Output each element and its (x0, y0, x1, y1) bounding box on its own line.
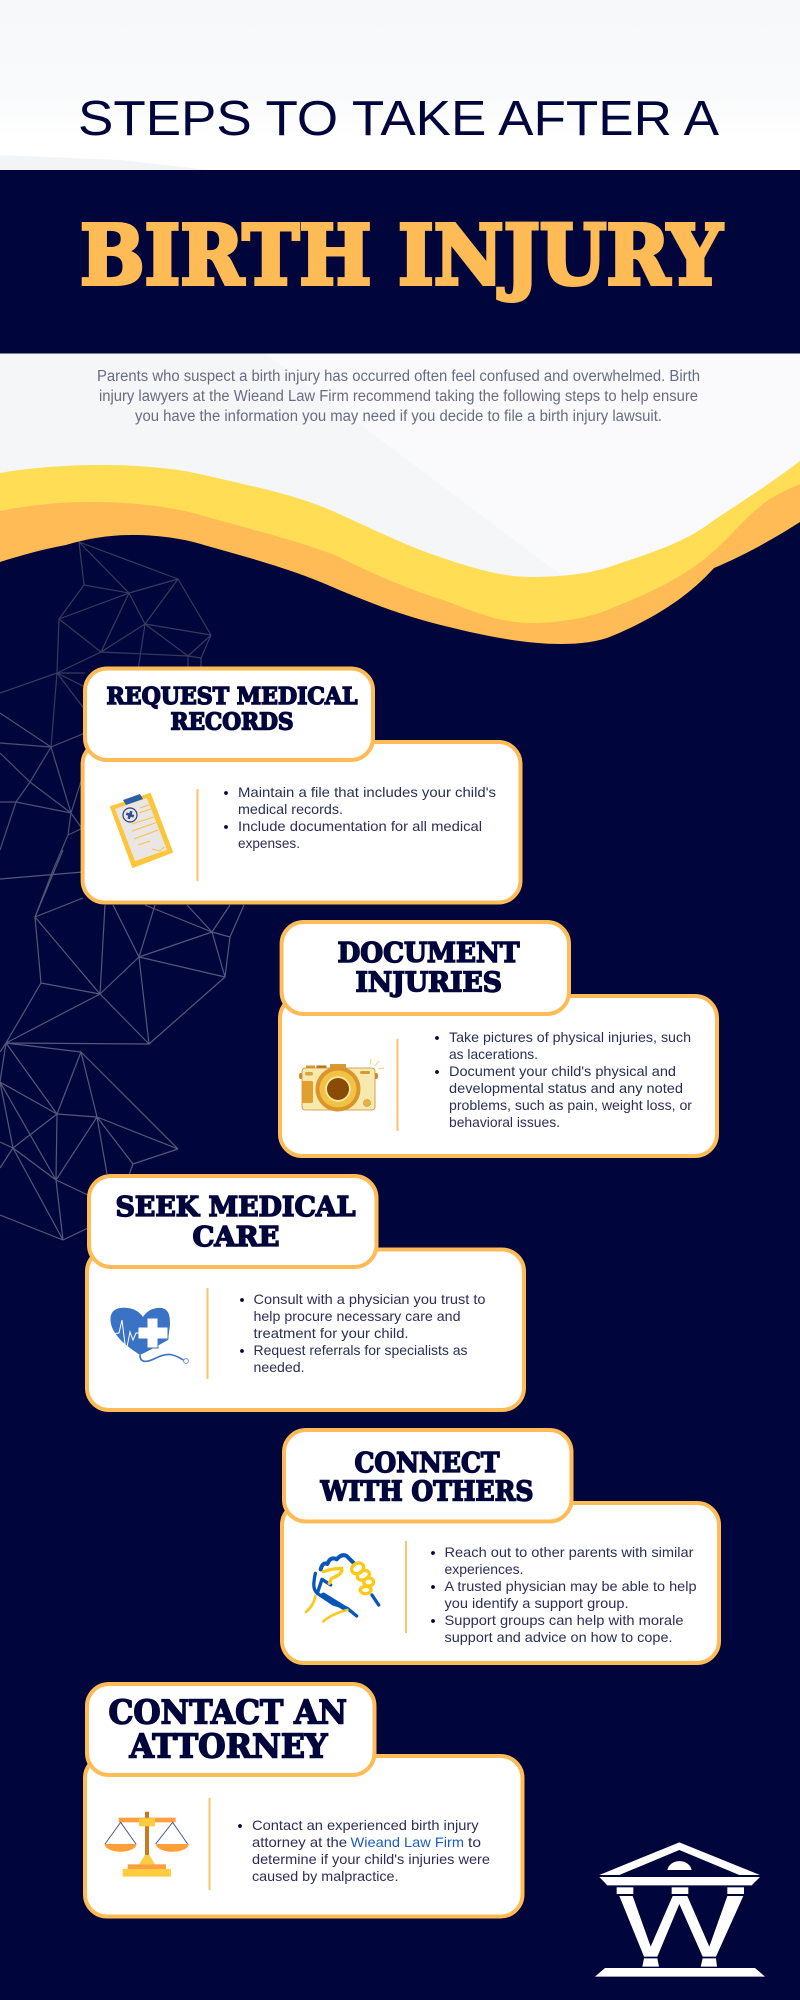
card 4 heading: CONNECT (354, 1447, 500, 1479)
card 2 heading: INJURIES (356, 966, 502, 998)
icon: clipboard (111, 794, 172, 867)
card 3 bullet list: needed. (254, 1359, 304, 1375)
card 3 heading (116, 1191, 356, 1253)
card 2 bullet list: developmental status and any noted (449, 1080, 683, 1096)
card 3 heading box (89, 1176, 376, 1267)
card 2 bullet list: Take pictures of physical injuries, such (449, 1029, 691, 1045)
title: steps to take after a: STEPS TO TAKE AFTER A (78, 92, 719, 146)
card 5 bullet list: attorney at the (252, 1834, 347, 1850)
intro paragraph: injury lawyers at the Wieand Law Firm recommend taking the following steps to help ensure (99, 388, 698, 405)
card 1 bullet list: Include documentation for all medical (238, 818, 482, 834)
intro paragraph: Parents who suspect a birth injury has occurred often feel confused and overwhelmed. Birth (97, 368, 700, 385)
card 5 bullet list: to (468, 1834, 481, 1850)
card 4 heading (320, 1447, 534, 1508)
card 5 heading (108, 1692, 347, 1766)
card 1 heading box (85, 668, 373, 760)
card 2: document injuries (280, 922, 717, 1156)
card 1: request medical records (83, 668, 520, 902)
card 1 bullet list (224, 784, 496, 851)
card 2 bullet list: as lacerations. (449, 1046, 538, 1062)
card 3 heading: SEEK MEDICAL (116, 1191, 356, 1223)
card 5 bullet list: determine if your child's injuries were (252, 1851, 490, 1867)
card 3: seek medical care (87, 1176, 524, 1410)
icon: heart with stethoscope (110, 1308, 188, 1363)
card 4 heading: WITH OTHERS (320, 1476, 534, 1508)
card 5 heading box (87, 1684, 374, 1775)
card 4 bullet list: support and advice on how to cope. (444, 1629, 672, 1645)
card 4 bullet list: A trusted physician may be able to help (444, 1578, 697, 1594)
card 3 bullet list: Consult with a physician you trust to (254, 1291, 486, 1307)
banner: birth injury (0, 170, 800, 354)
logo: Wieand Law Firm building W (595, 1842, 765, 1977)
card 1 bullet list: expenses. (238, 835, 300, 851)
card 5 body panel (85, 1756, 522, 1916)
card 5 heading: ATTORNEY (129, 1726, 328, 1766)
background: polygon mesh (0, 542, 244, 1240)
wave: yellow and orange bands (0, 461, 800, 720)
card 2 bullet list (435, 1029, 692, 1130)
card 5 bullet list: Wieand Law Firm (350, 1834, 464, 1850)
card 5: contact an attorney (85, 1684, 522, 1916)
intro paragraph: you have the information you may need if you decide to file a birth injury lawsuit. (135, 408, 662, 425)
card 5 heading: CONTACT AN (108, 1692, 347, 1732)
card 1 heading: RECORDS (170, 708, 294, 736)
card 2 heading (338, 937, 520, 998)
card 4 bullet list: you identify a support group. (444, 1595, 628, 1611)
card 2 bullet list: Document your child's physical and (449, 1063, 676, 1079)
card 2 heading box (282, 922, 569, 1014)
card 4 bullet list: Support groups can help with morale (444, 1612, 684, 1628)
card 1 heading (106, 682, 358, 736)
card 3 bullet list (240, 1291, 486, 1375)
card 3 heading: CARE (192, 1221, 280, 1253)
card 3 bullet list: help procure necessary care and (254, 1308, 460, 1324)
card 1 bullet list: medical records. (238, 801, 343, 817)
card 4 bullet list (431, 1544, 697, 1645)
card 3 body panel (87, 1250, 524, 1410)
card 5 bullet list (238, 1817, 490, 1884)
card 5 bullet list: caused by malpractice. (252, 1868, 398, 1884)
card 2 bullet list: problems, such as pain, weight loss, or (449, 1097, 692, 1113)
icon: camera (299, 1059, 384, 1112)
card 2 bullet list: behavioral issues. (449, 1114, 560, 1130)
card 3 bullet list: Request referrals for specialists as (254, 1342, 468, 1358)
card 2 heading: DOCUMENT (338, 937, 520, 969)
icon: scales of justice (104, 1812, 189, 1877)
card 4: connect with others (282, 1430, 719, 1663)
card 2 body panel (280, 996, 717, 1156)
card 5 bullet list: Contact an experienced birth injury (252, 1817, 479, 1833)
card 4 bullet list: experiences. (444, 1561, 524, 1577)
card 3 bullet list: treatment for your child. (254, 1325, 408, 1341)
card 4 body panel (282, 1503, 719, 1663)
card 1 body panel (83, 742, 520, 902)
banner: birth injury: BIRTH INJURY (80, 208, 723, 304)
card 4 bullet list: Reach out to other parents with similar (444, 1544, 694, 1560)
card 4 heading box (284, 1430, 572, 1522)
icon: clasped hands (306, 1555, 379, 1621)
card 1 bullet list: Maintain a file that includes your child's (238, 784, 496, 800)
intro paragraph (97, 368, 700, 425)
card 1 heading: REQUEST MEDICAL (106, 682, 358, 710)
